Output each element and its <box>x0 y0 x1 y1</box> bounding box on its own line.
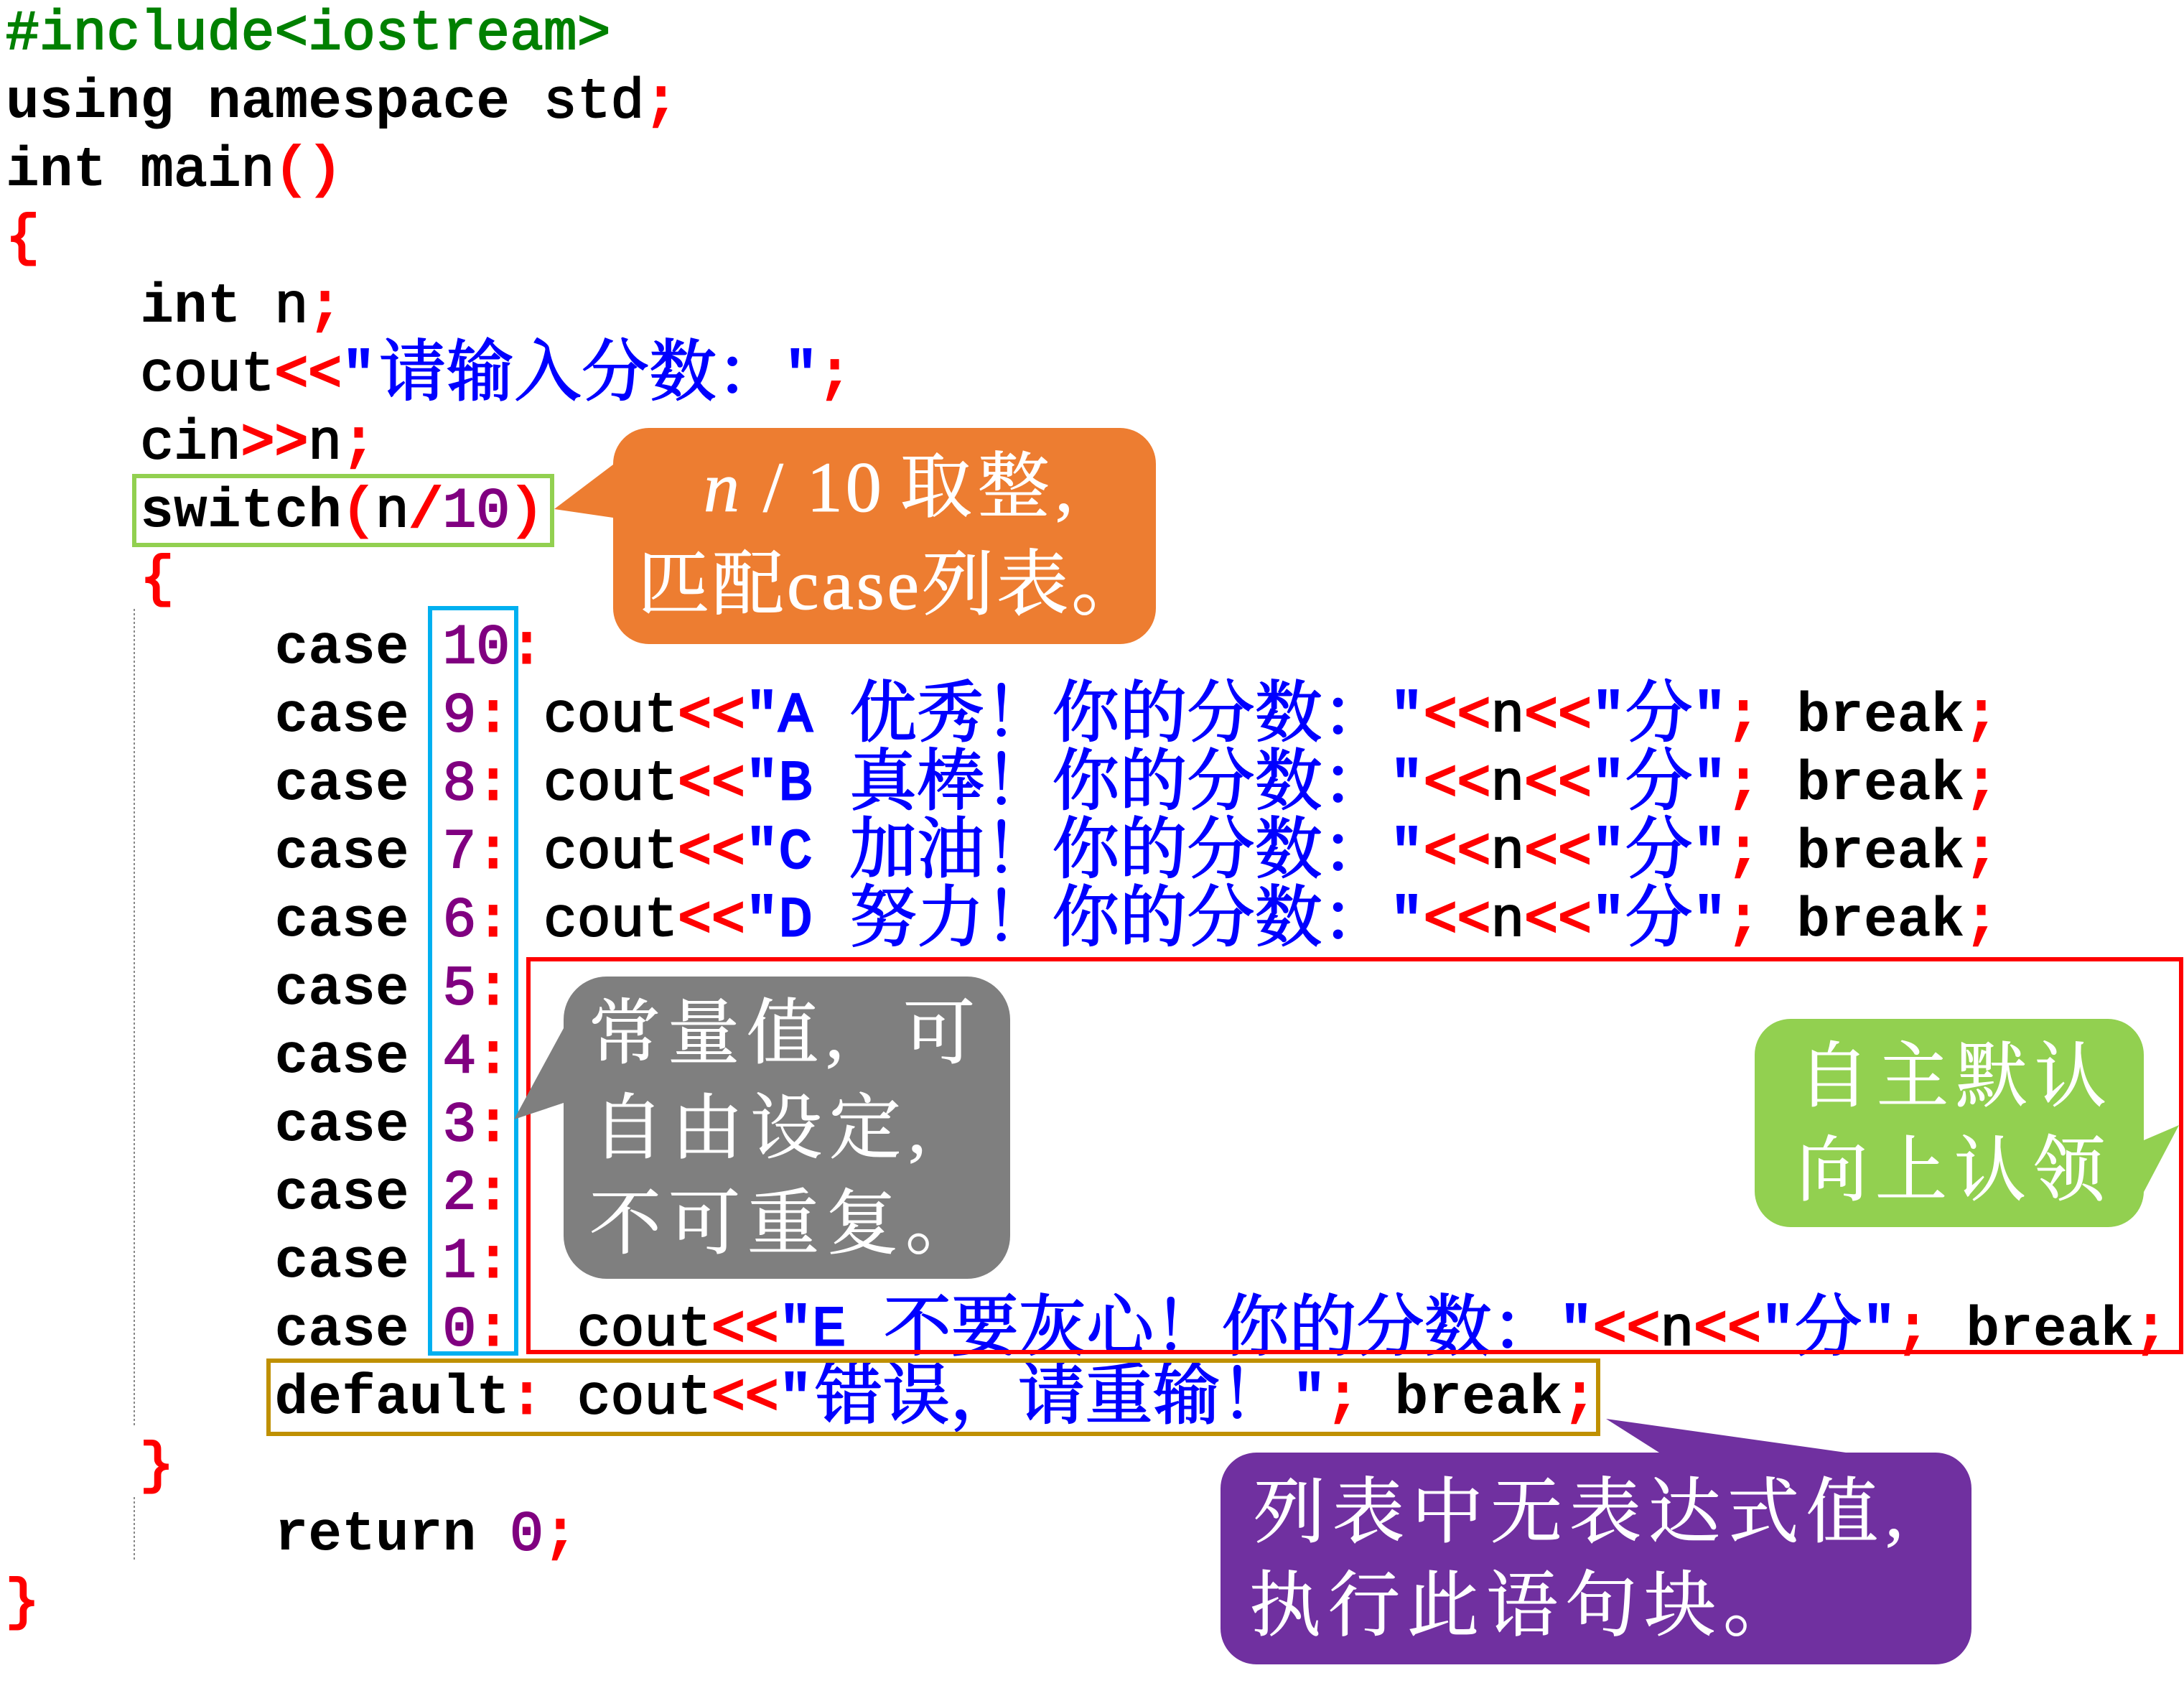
highlight: case constants <box>430 608 516 1353</box>
case 6: case 6: cout<<"D 努力！你的分数："<<n<<"分"; break; <box>6 882 1998 956</box>
highlight: switch expression <box>134 476 552 545</box>
switch close brace: } <box>6 1435 174 1499</box>
case 10: case 10: <box>6 617 543 680</box>
case 4: case 4: <box>6 1026 510 1089</box>
case 5: case 5: <box>6 958 510 1021</box>
callout text line 1: 可 <box>903 994 982 1073</box>
callout text line 1: 自主默认 <box>1798 1037 2114 1117</box>
callout text line 1: n / 10 取整, <box>704 447 1079 527</box>
callout text line 2: 自由设定, <box>592 1089 933 1168</box>
callout text line 3: 不可重复。 <box>589 1184 984 1264</box>
include line: #include<iostream> <box>6 3 611 66</box>
using namespace line: using namespace std; <box>6 71 678 134</box>
case 0: case 0: cout<<"E 不要灰心！你的分数："<<n<<"分"; break; <box>6 1291 2167 1365</box>
switch line: switch(n/10) <box>6 480 543 544</box>
main close brace: } <box>6 1572 39 1635</box>
declaration line: int n; <box>6 276 342 339</box>
callout text line 1: 列表中无表达式值, <box>1254 1473 1910 1552</box>
case 9: case 9: cout<<"A 优秀！你的分数："<<n<<"分"; break; <box>6 677 1998 751</box>
case 7: case 7: cout<<"C 加油！你的分数："<<n<<"分"; break; <box>6 814 1998 887</box>
switch open brace: { <box>6 549 174 612</box>
callout: case constants note <box>514 977 1010 1279</box>
case 3: case 3: <box>6 1094 510 1157</box>
case 8: case 8: cout<<"B 真棒！你的分数："<<n<<"分"; break; <box>6 745 1998 819</box>
case 2: case 2: <box>6 1162 510 1226</box>
input line: cin>>n; <box>6 412 375 475</box>
callout text line 1: 常量值, <box>589 994 851 1073</box>
callout text line 2: 执行此语句块。 <box>1249 1566 1802 1646</box>
callout: default branch note <box>1221 1419 1971 1664</box>
callout text line 2: 向上认领 <box>1796 1131 2112 1211</box>
highlight: low score cases <box>528 959 2181 1352</box>
case 1: case 1: <box>6 1231 510 1294</box>
callout: default upward <box>1755 1019 2179 1227</box>
highlight: default branch <box>269 1361 1598 1434</box>
callout: n / 10 <box>554 428 1156 644</box>
main line: int main() <box>6 139 342 202</box>
default line: default: cout<<"错误，请重输！"; break; <box>6 1359 1596 1433</box>
callout text line 2: 匹配case列表。 <box>638 545 1146 625</box>
main open brace: { <box>6 208 39 271</box>
prompt line: cout<<"请输入分数："; <box>6 336 851 410</box>
return line: return 0; <box>6 1504 577 1567</box>
